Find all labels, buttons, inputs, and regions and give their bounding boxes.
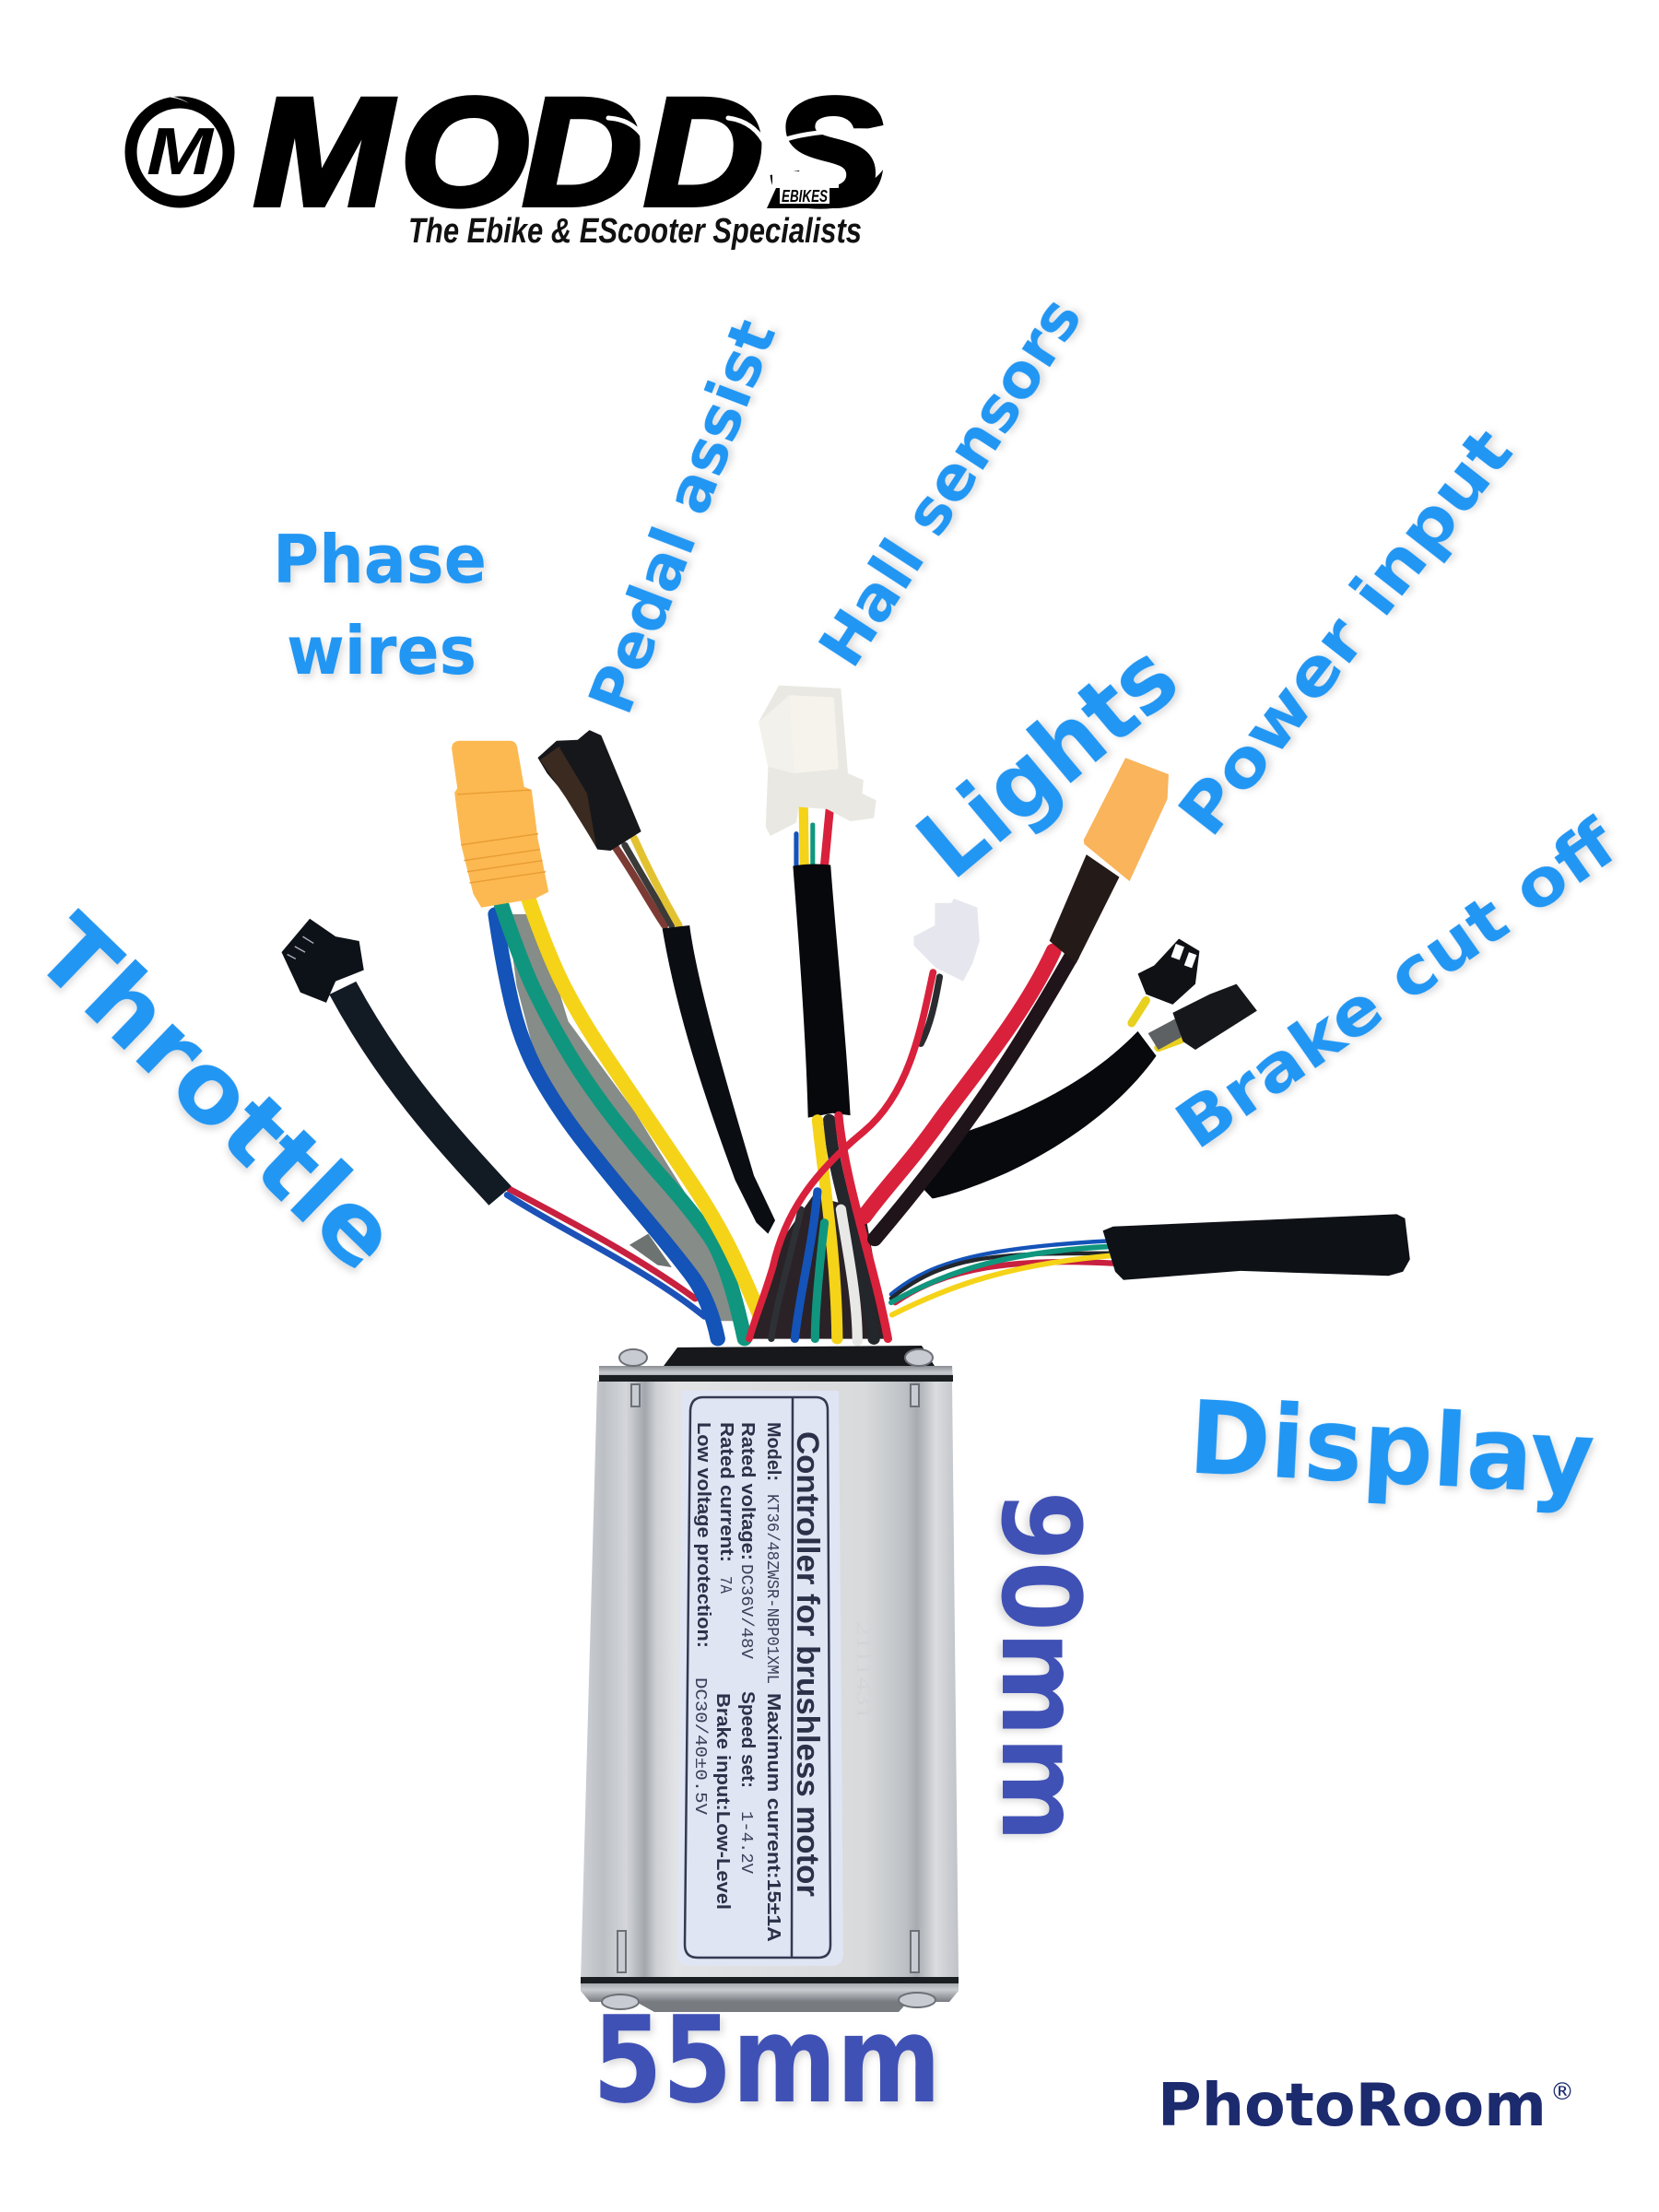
bottom end cap bbox=[581, 1977, 959, 2012]
logo: Modds Ebikes bbox=[131, 66, 883, 251]
label: Lights: Lights bbox=[897, 622, 1198, 900]
sticker specifications: 7A bbox=[715, 1576, 734, 1594]
controller box bbox=[581, 1346, 959, 2012]
top end cap bbox=[599, 1366, 953, 1382]
label: Pedal assist: Pedal assist bbox=[575, 311, 790, 723]
sticker specifications bbox=[690, 1422, 783, 1942]
dimension: 90mm: 90mm bbox=[977, 1491, 1104, 1841]
sticker specifications: 1-4.2V bbox=[736, 1811, 755, 1874]
brake cut off cable bbox=[922, 939, 1257, 1198]
EBIKES tag bbox=[767, 170, 883, 208]
pedal assist cable bbox=[537, 730, 775, 1234]
watermark: PhotoRoom: PhotoRoom bbox=[1158, 2072, 1547, 2140]
ghost batch number: 2111431 bbox=[853, 1621, 876, 1720]
display cable bbox=[891, 1214, 1410, 1315]
central wire bundle bbox=[752, 1115, 888, 1341]
power input cable bbox=[865, 758, 1169, 1239]
wiring right group bbox=[865, 758, 1410, 1315]
icon: circular M emblem bbox=[131, 96, 229, 202]
label: Throttle: Throttle bbox=[13, 894, 420, 1292]
icon: circular M emblem: M bbox=[147, 115, 215, 189]
phase mesh sleeve bbox=[507, 914, 747, 1321]
throttle cable bbox=[282, 919, 704, 1316]
wiring left group bbox=[282, 686, 980, 1341]
sticker specifications: KT36/48ZWSR-NBP01XML bbox=[762, 1494, 781, 1684]
sticker specifications: Speed set: bbox=[737, 1691, 758, 1788]
sticker specifications: Rated voltage: bbox=[737, 1422, 758, 1560]
body extrusion bbox=[581, 1381, 959, 1980]
sticker specifications: DC36V/48V bbox=[736, 1564, 755, 1659]
top connector block bbox=[664, 1346, 935, 1366]
label: Brake cut off: Brake cut off bbox=[1162, 804, 1631, 1164]
sticker label bbox=[677, 1391, 843, 1966]
sticker specifications: Low voltage protection: bbox=[693, 1422, 713, 1648]
lights cable bbox=[749, 899, 980, 1339]
sticker specifications: Model: bbox=[763, 1422, 783, 1481]
sticker specifications: Maximum current:15±1A bbox=[763, 1693, 783, 1942]
label: Phase wires: wires bbox=[287, 612, 477, 689]
label: Power input: Power input bbox=[1164, 415, 1527, 850]
EBIKES tag: EBIKES bbox=[782, 187, 828, 206]
sticker specifications: Rated current: bbox=[716, 1422, 736, 1562]
dimension: 55mm: 55mm bbox=[593, 1990, 941, 2130]
sticker specifications: Brake input:Low-Level bbox=[712, 1693, 733, 1910]
watermark: PhotoRoom: ® bbox=[1550, 2078, 1574, 2106]
tagline: The Ebike & EScooter Specialists bbox=[408, 212, 862, 251]
label: Phase wires: Phase bbox=[273, 521, 487, 598]
label: Phase wires bbox=[273, 521, 487, 689]
label: Display: Display bbox=[1186, 1379, 1597, 1517]
label: Hall sensors: Hall sensors bbox=[806, 285, 1096, 679]
screws bbox=[602, 1349, 935, 2009]
hall sensor cable bbox=[759, 686, 877, 1118]
sticker title: Controller for brushless motor bbox=[790, 1431, 825, 1897]
sticker specifications: DC30/40±0.5V bbox=[690, 1677, 709, 1815]
phase wires bbox=[452, 741, 766, 1339]
wordmark swoosh cuts bbox=[608, 118, 876, 147]
wordmark MODDS: MODDS bbox=[253, 66, 882, 238]
